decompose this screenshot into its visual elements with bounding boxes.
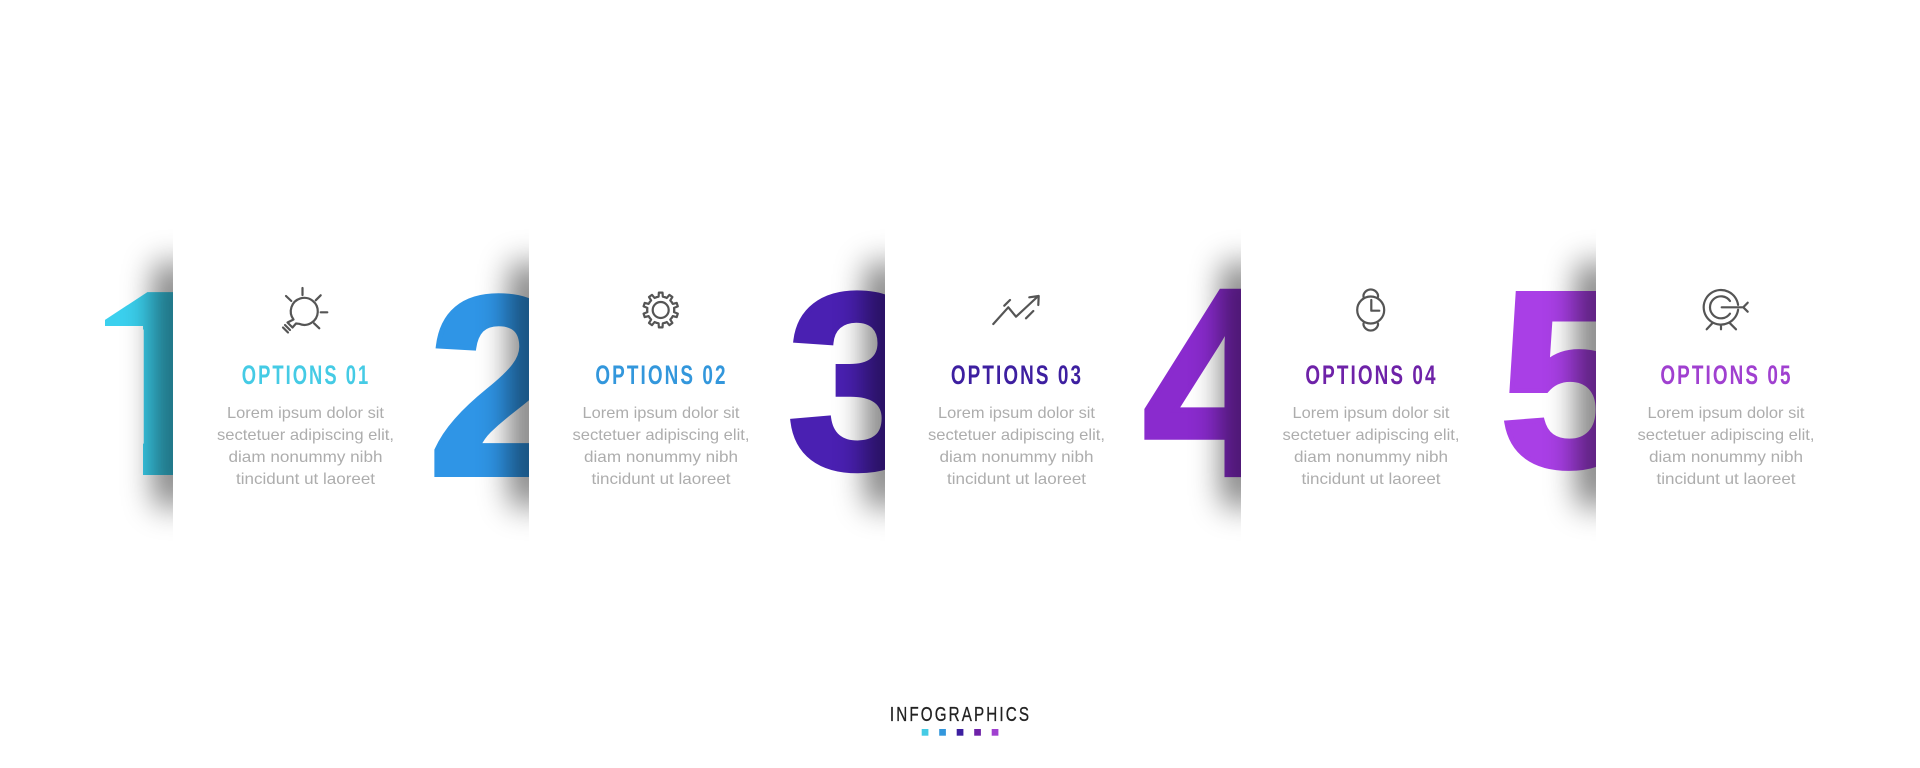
text: options 01: diam nonummy nibh (228, 449, 382, 466)
panel: options 05 (1596, 200, 1920, 560)
text: options 04: tincidunt ut laoreet (1302, 471, 1441, 488)
number 1: 1 (86, 238, 229, 528)
number 3: 3 (787, 241, 929, 521)
text: options 05 (1638, 405, 1814, 488)
heading: options 03: OPTIONS 03 (951, 360, 1083, 390)
text: options 03: Lorem ipsum dolor sit (938, 405, 1096, 422)
panel: options 01 (173, 200, 529, 560)
text: options 01 (217, 405, 394, 488)
panel: options 03 (885, 200, 1241, 560)
text: options 05: diam nonummy nibh (1649, 449, 1803, 466)
text: options 02: Lorem ipsum dolor sit (582, 405, 740, 422)
text: options 05: tincidunt ut laoreet (1656, 471, 1796, 488)
heading: options 05: OPTIONS 05 (1660, 360, 1793, 390)
text: options 01: sectetuer adipiscing elit, (217, 427, 394, 444)
footer title: INFOGRAPHICS (890, 703, 1031, 726)
panel: options 02 (529, 200, 885, 560)
icon: target (1704, 290, 1748, 329)
text: options 04: diam nonummy nibh (1294, 449, 1448, 466)
text: options 02 (572, 405, 750, 488)
text: options 05: Lorem ipsum dolor sit (1648, 405, 1805, 422)
text: options 03: diam nonummy nibh (940, 449, 1094, 466)
heading: options 01: OPTIONS 01 (242, 359, 370, 390)
text: options 03: sectetuer adipiscing elit, (928, 427, 1105, 444)
icon: watch (1357, 289, 1384, 331)
heading: options 02: OPTIONS 02 (595, 360, 728, 390)
text: options 03 (928, 405, 1105, 488)
icon: light bulb (283, 288, 327, 332)
icon: trend arrow (993, 296, 1039, 324)
text: options 02: diam nonummy nibh (584, 449, 738, 466)
text: options 04 (1282, 405, 1460, 488)
step 3 (787, 200, 1241, 560)
text: options 04: Lorem ipsum dolor sit (1292, 405, 1450, 422)
step 1 (105, 243, 392, 527)
step 5 (1499, 200, 1920, 560)
footer colour squares (922, 729, 998, 736)
text: options 01: Lorem ipsum dolor sit (227, 405, 385, 422)
step 2 (428, 200, 885, 560)
number 4: 4 (1143, 235, 1287, 532)
text: options 02: sectetuer adipiscing elit, (572, 427, 750, 444)
number 5: 5 (1499, 239, 1641, 519)
text: options 05: sectetuer adipiscing elit, (1638, 427, 1814, 444)
text: options 02: tincidunt ut laoreet (592, 471, 731, 488)
number 2: 2 (428, 244, 570, 530)
heading: options 04: OPTIONS 04 (1305, 360, 1438, 390)
icon: gear (643, 293, 679, 327)
text: options 03: tincidunt ut laoreet (947, 471, 1087, 488)
step 4 (1143, 200, 1596, 560)
text: options 04: sectetuer adipiscing elit, (1282, 427, 1460, 444)
text: options 01: tincidunt ut laoreet (236, 471, 376, 488)
panel: options 04 (1241, 200, 1596, 560)
